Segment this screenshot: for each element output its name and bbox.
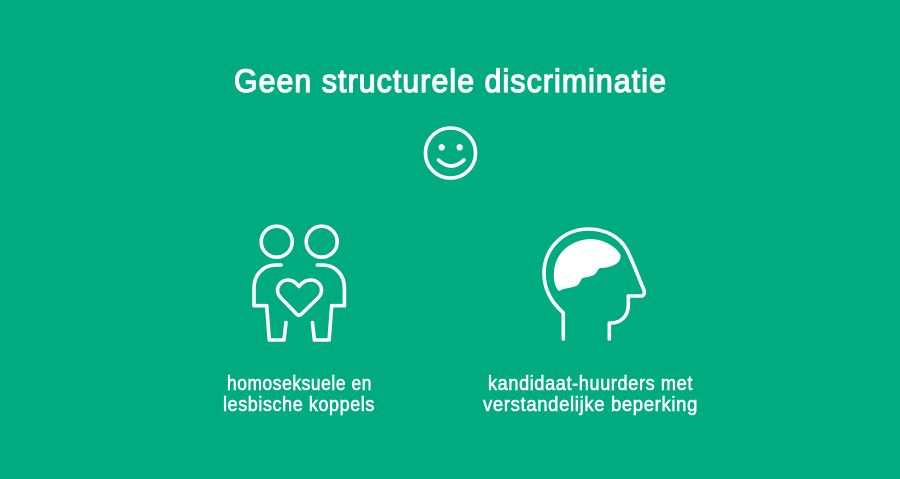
label: couples: lesbische koppels	[223, 394, 375, 416]
label: tenants	[483, 373, 698, 416]
icon: couple with heart	[254, 226, 344, 340]
brain	[554, 239, 621, 291]
label: couples: homoseksuele en	[227, 373, 372, 395]
label: tenants: verstandelijke beperking	[483, 394, 698, 416]
label: couples	[223, 373, 375, 416]
icon: head with brain	[544, 229, 644, 339]
icon: smiley face	[426, 128, 476, 178]
title: Geen structurele discriminatie	[234, 63, 667, 99]
label: tenants: kandidaat-huurders met	[488, 373, 693, 395]
